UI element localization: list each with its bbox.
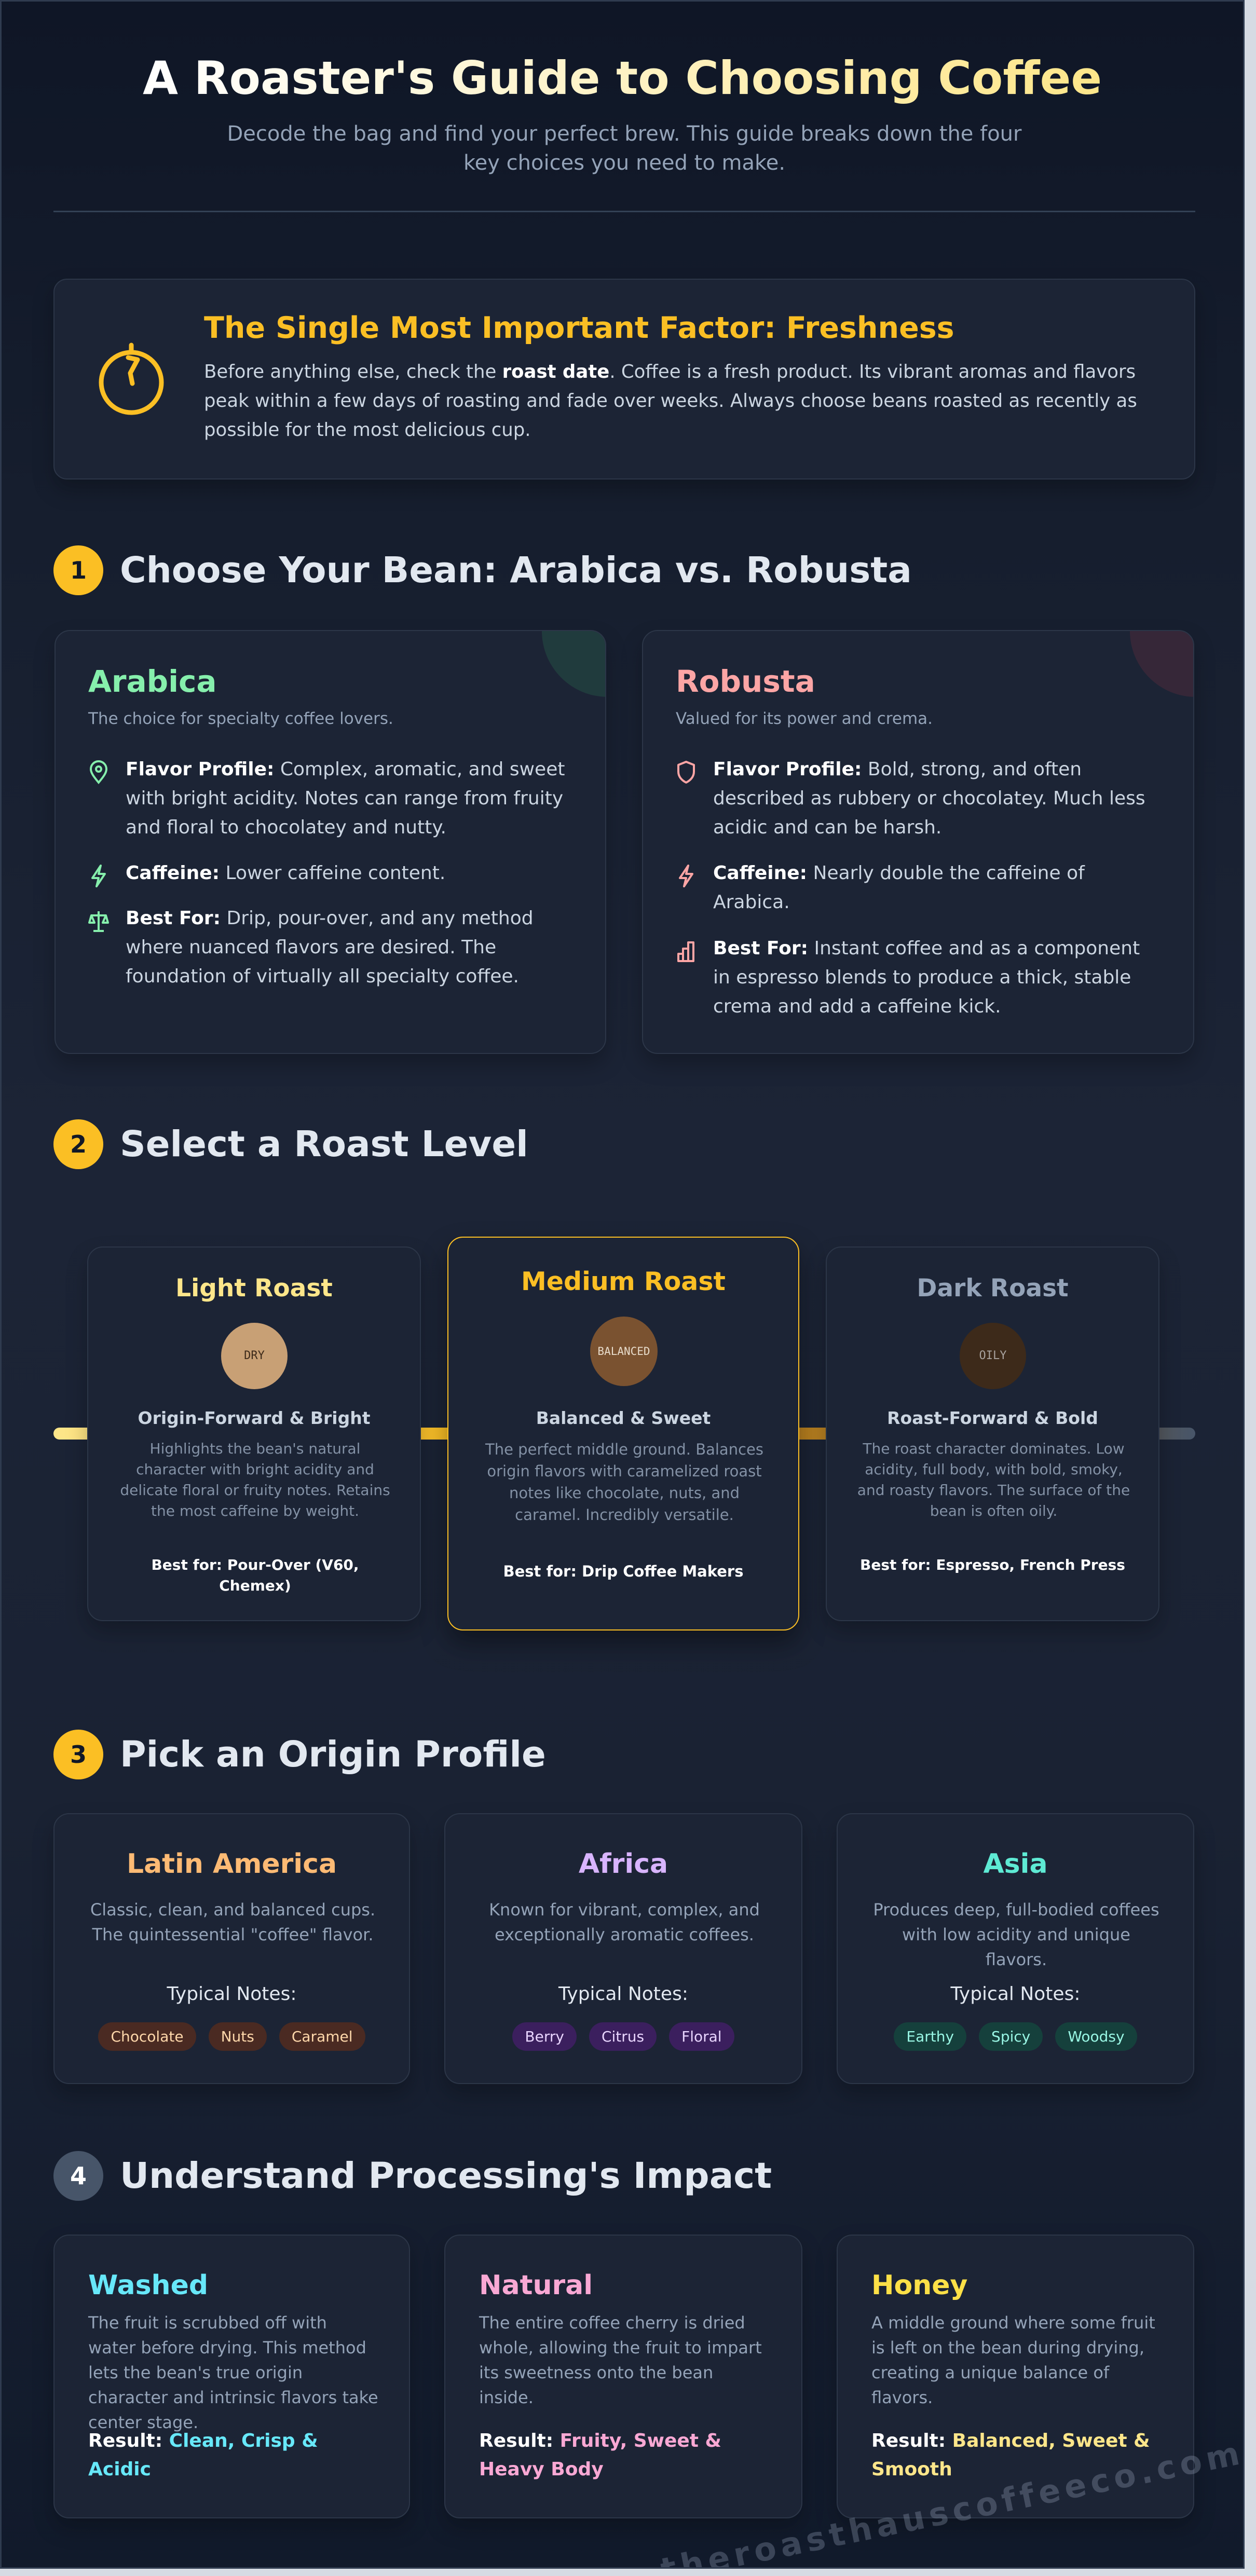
asia description: Produces deep, full-bodied coffees with low acidity and unique flavors. (873, 1900, 1159, 1969)
panel: honey (837, 2235, 1194, 2518)
washed description: lets the bean's true origin (88, 2363, 303, 2382)
roast track bar (53, 1428, 1195, 1440)
robusta title: Robusta (676, 664, 815, 699)
washed description: center stage. (88, 2413, 198, 2432)
asia notes label: Typical Notes: (951, 1983, 1080, 2005)
washed title: Washed (88, 2270, 208, 2301)
washed description: The fruit is scrubbed off with (88, 2313, 327, 2333)
africa notes label: Typical Notes: (558, 1983, 688, 2005)
bean: oily: OILY (979, 1349, 1006, 1362)
medium title: Medium Roast (521, 1267, 726, 1296)
dark best for: Best for: Espresso, French Press (860, 1556, 1125, 1573)
latin description: Classic, clean, and balanced cups. The quintessential "coffee" flavor. (90, 1900, 375, 1944)
dark description: The roast character dominates. Low acidity, full body, with bold, smoky, and roasty flavors. The surface of the bean is often oily. (857, 1440, 1130, 1519)
panel: latin america (53, 1813, 410, 2084)
panel: medium roast (447, 1237, 799, 1630)
medium description: The perfect middle ground. Balances origin flavors with caramelized roast notes like chocolate, nuts, and caramel. Incredibly versatile. (485, 1441, 763, 1524)
dark subhead: Roast-Forward & Bold (887, 1408, 1098, 1428)
bean: balanced (590, 1317, 658, 1386)
honey result: Result: Balanced, Sweet & Smooth (871, 2430, 1150, 2480)
heading: section 4: 4 (70, 2162, 87, 2190)
item: best for: Best For: Instant coffee and as a component in espresso blends to produce a thick, stable crema and add a caffeine kick. (713, 938, 1140, 1017)
bean: dry (221, 1323, 288, 1389)
asia pills: Spicy (991, 2028, 1030, 2045)
robusta subtitle: Valued for its power and crema. (676, 709, 933, 728)
latin pills: Caramel (292, 2028, 353, 2045)
asia pills: Woodsy (1068, 2028, 1125, 2045)
light title: Light Roast (175, 1274, 333, 1303)
subtitle: Decode the bag and find your perfect brew. This guide breaks down the four key choices you need to make. (227, 122, 1021, 175)
latin notes label: Typical Notes: (167, 1983, 296, 2005)
heading: section 2: 2 (70, 1130, 87, 1158)
heading: section 1: 1 (70, 556, 87, 584)
panel: dark roast (826, 1246, 1159, 1621)
asia pills (894, 2022, 1137, 2051)
africa pills: Berry (525, 2028, 564, 2045)
title: A Roaster's Guide to Choosing Coffee (143, 51, 1102, 105)
item: flavor: Flavor Profile: Complex, aromatic, and sweet with bright acidity. Notes can range from fruity and floral to chocolatey and nutty. (126, 759, 565, 838)
item: caffeine: Caffeine: Nearly double the caffeine of Arabica. (713, 862, 1085, 913)
natural description: The entire coffee cherry is dried whole, allowing the fruit to impart its sweetness onto the bean inside. (479, 2313, 762, 2407)
panel: natural (444, 2235, 802, 2518)
washed result: Result: Clean, Crisp & Acidic (88, 2430, 318, 2480)
panel: africa (444, 1813, 802, 2084)
natural title: Natural (479, 2270, 593, 2301)
body text: Before anything else, check the roast date. Coffee is a fresh product. Its vibrant aromas and flavors peak within a few days of roasting and fade over weeks. Always choose beans roasted as recently as possible for the most delicious cup. (204, 361, 1137, 441)
latin pills: Nuts (221, 2028, 254, 2045)
bean: balanced: BALANCED (597, 1345, 650, 1358)
panel: robusta (642, 630, 1194, 1054)
heading: section 2: Select a Roast Level (120, 1123, 528, 1165)
light description: Highlights the bean's natural character with bright acidity and delicate floral or fruity notes. Retains the most caffeine by weight. (120, 1440, 390, 1519)
panel: arabica (54, 630, 606, 1054)
washed description (88, 2313, 378, 2432)
light best for: Best for: Pour-Over (V60, Chemex) (151, 1556, 359, 1594)
bean: oily (960, 1323, 1026, 1389)
natural result: Result: Fruity, Sweet & Heavy Body (479, 2430, 721, 2480)
latin pills (98, 2022, 365, 2051)
heading: section 3: 3 (70, 1741, 87, 1769)
honey description: A middle ground where some fruit is left on the bean during drying, creating a unique balance of flavors. (871, 2313, 1155, 2407)
heading: section 3: Pick an Origin Profile (120, 1734, 546, 1775)
panel: washed (53, 2235, 410, 2518)
heading: The Single Most Important Factor: Freshness (204, 311, 954, 345)
arabica title: Arabica (88, 664, 217, 699)
arabica subtitle: The choice for specialty coffee lovers. (88, 709, 393, 728)
africa title: Africa (579, 1848, 668, 1880)
item: flavor: Flavor Profile: Bold, strong, and often described as rubbery or chocolatey. Much less acidic and can be harsh. (713, 759, 1145, 838)
honey title: Honey (871, 2270, 967, 2301)
panel: freshness (53, 279, 1195, 479)
africa pills (512, 2022, 734, 2051)
item: caffeine: Caffeine: Lower caffeine content. (126, 862, 445, 884)
light subhead: Origin-Forward & Bright (138, 1408, 370, 1428)
africa description: Known for vibrant, complex, and exceptionally aromatic coffees. (489, 1900, 760, 1944)
bean: dry: DRY (244, 1349, 265, 1362)
medium best for: Best for: Drip Coffee Makers (503, 1563, 743, 1580)
latin pills: Chocolate (111, 2028, 184, 2045)
heading: section 1: Choose Your Bean: Arabica vs. Robusta (120, 550, 912, 591)
washed description: water before drying. This method (88, 2338, 366, 2358)
africa pills: Floral (681, 2028, 722, 2045)
asia pills: Earthy (906, 2028, 954, 2045)
panel: asia (837, 1813, 1194, 2084)
africa pills: Citrus (602, 2028, 644, 2045)
washed description: character and intrinsic flavors take (88, 2388, 378, 2407)
icon: timer bolt (99, 342, 164, 415)
heading: section 4: Understand Processing's Impact (120, 2155, 772, 2197)
item: best for: Best For: Drip, pour-over, and any method where nuanced flavors are desired. The foundation of virtually all specialty coffee. (126, 908, 534, 987)
medium subhead: Balanced & Sweet (536, 1408, 711, 1428)
panel: light roast (87, 1246, 421, 1621)
asia title: Asia (983, 1848, 1048, 1880)
latin title: Latin America (127, 1848, 337, 1880)
dark title: Dark Roast (917, 1274, 1069, 1303)
